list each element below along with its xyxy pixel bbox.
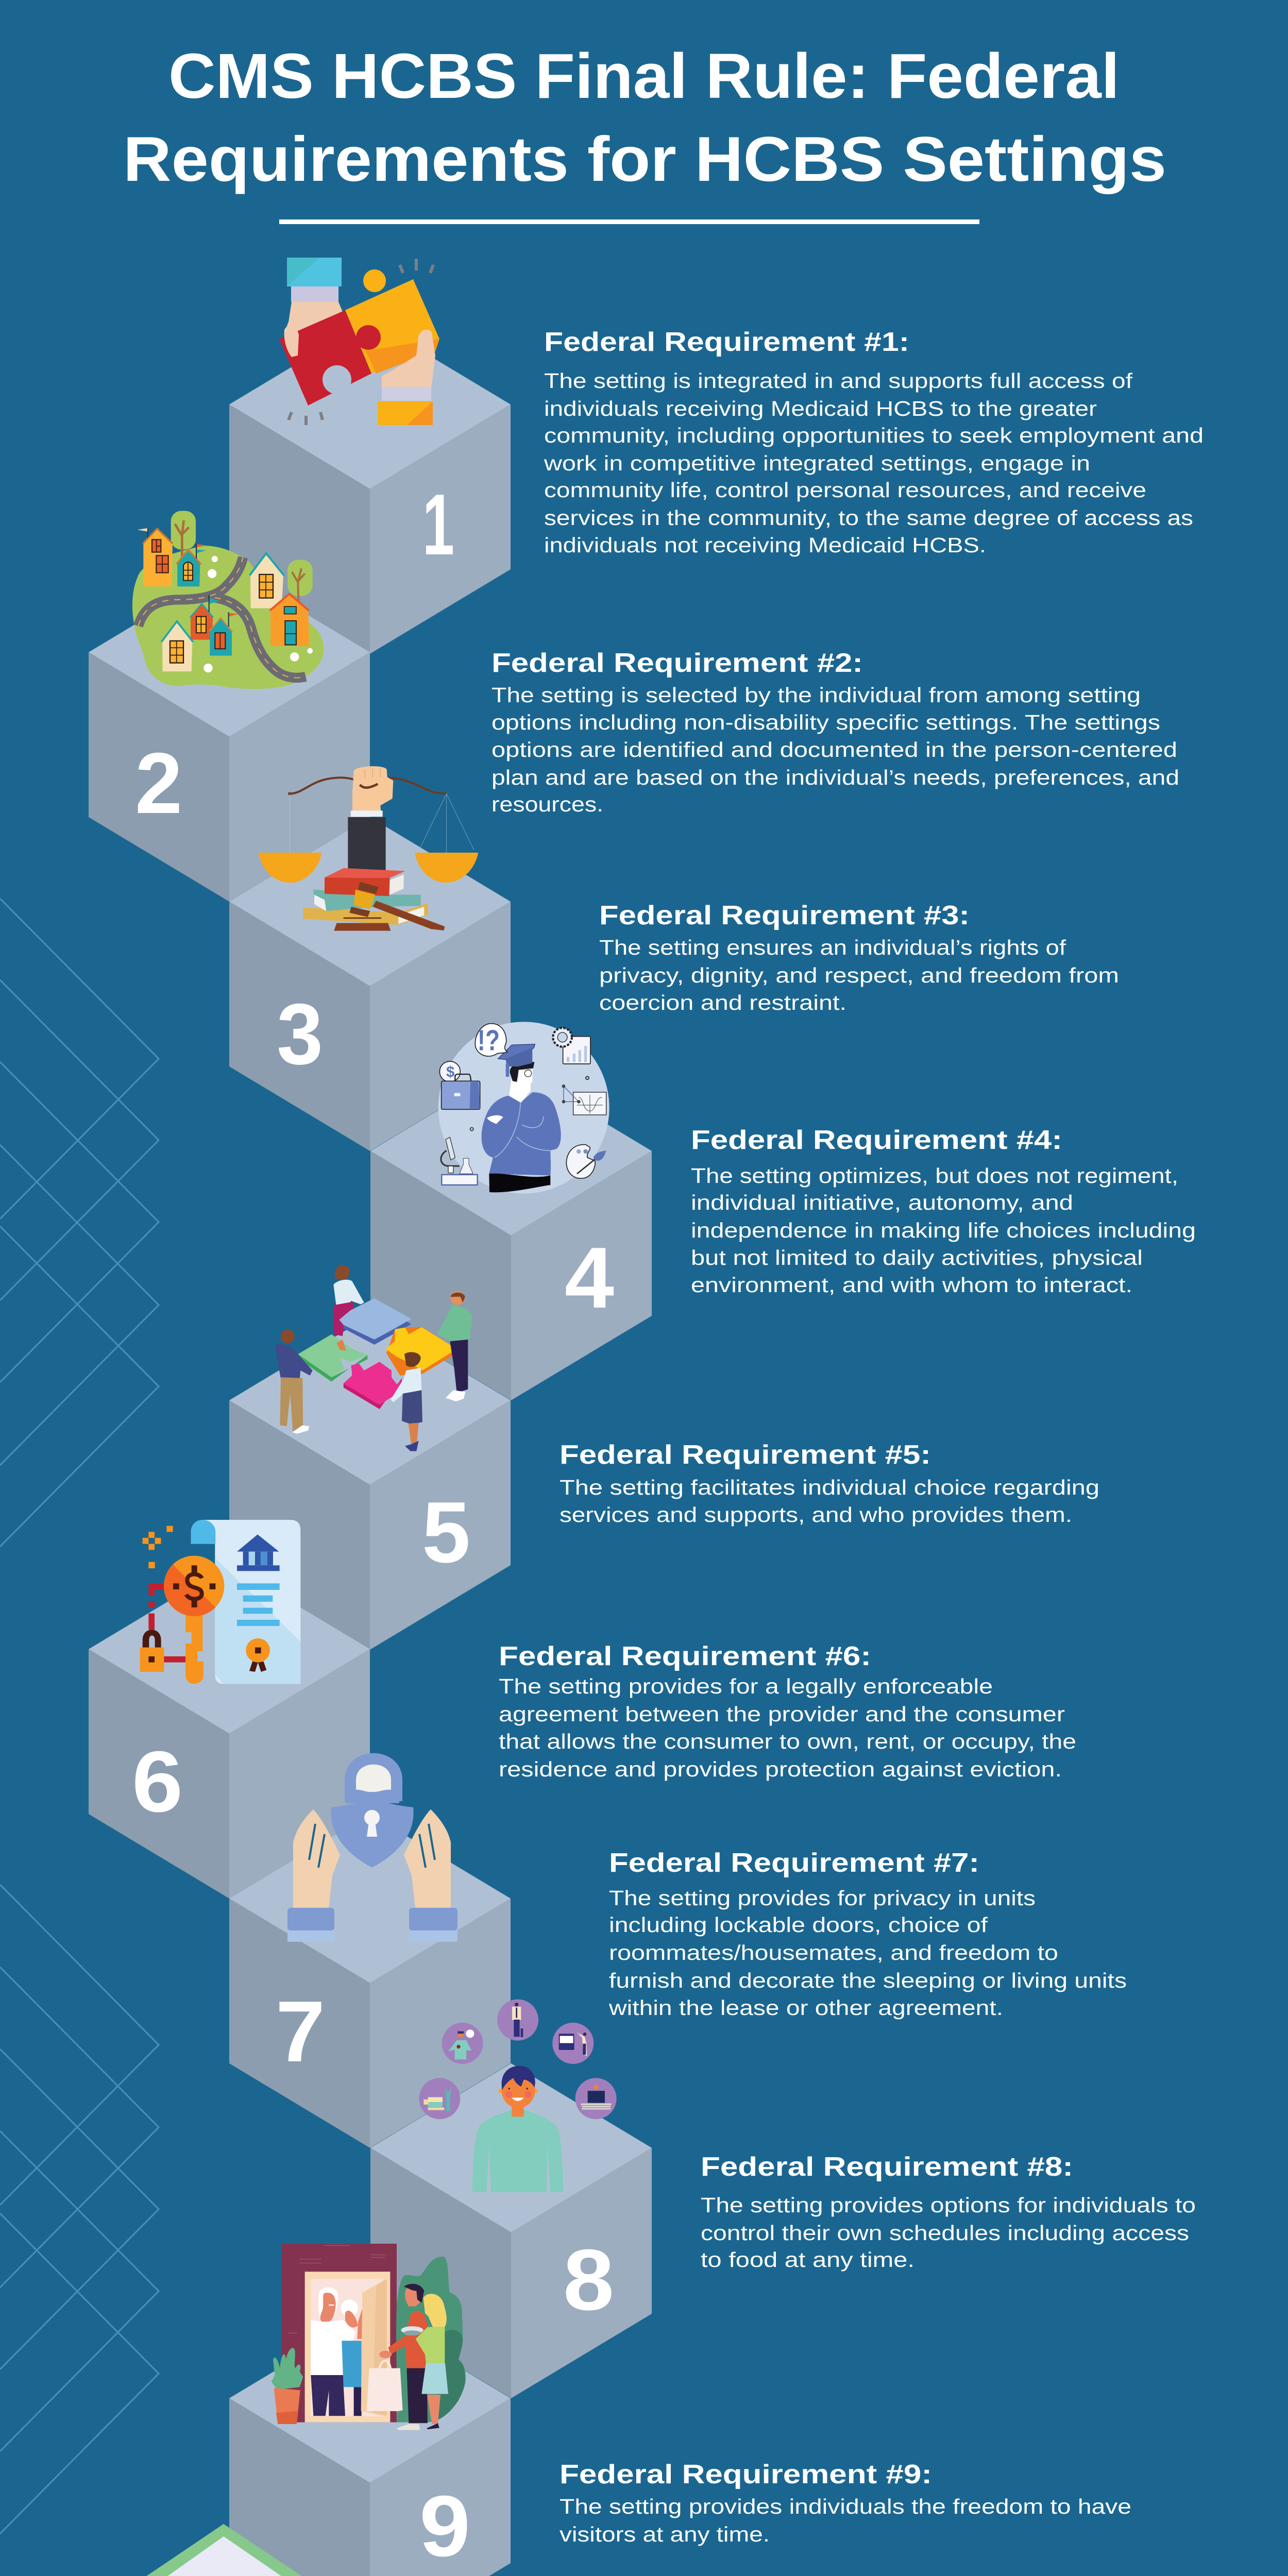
cube 3: 3 bbox=[277, 986, 323, 1082]
text block: requirement 4 bbox=[691, 1125, 1196, 1297]
text block: requirement 9: The setting provides individuals the freedom to have bbox=[560, 2495, 1131, 2518]
text block: requirement 5: The setting facilitates individual choice regarding bbox=[560, 1476, 1099, 1499]
text block: requirement 5: services and supports, and who provides them. bbox=[560, 1503, 1072, 1527]
text block: requirement 2 bbox=[492, 648, 1179, 816]
text block: requirement 4: independence in making life choices including bbox=[691, 1218, 1196, 1242]
icon: graduate thinking with surrounding objects: !? bbox=[478, 1024, 500, 1057]
icon: scales of justice, books and gavel bbox=[259, 766, 478, 931]
text block: requirement 2: options are identified and documented in the person-centered bbox=[492, 738, 1177, 761]
text block: requirement 1: community, including opportunities to seek employment and bbox=[544, 423, 1204, 447]
text block: requirement 4: but not limited to daily activities, physical bbox=[691, 1246, 1143, 1269]
text block: requirement 8: Federal Requirement #8: bbox=[701, 2152, 1073, 2182]
text block: requirement 9: visitors at any time. bbox=[560, 2522, 770, 2546]
icon: village map with houses and road bbox=[132, 511, 324, 689]
text block: requirement 1: individuals receiving Medicaid HCBS to the greater bbox=[544, 397, 1097, 420]
text block: requirement 2: resources. bbox=[492, 792, 603, 816]
cube 6 bbox=[89, 1565, 370, 1899]
icon: key, lock and legal document bbox=[140, 1520, 300, 1684]
text block: requirement 2: plan and are based on the individual’s needs, preferences, and bbox=[492, 766, 1179, 789]
text block: requirement 7: roommates/housemates, and freedom to bbox=[609, 1941, 1058, 1964]
text block: requirement 7: including lockable doors, choice of bbox=[609, 1913, 988, 1937]
text block: requirement 7 bbox=[608, 1848, 1127, 2020]
text block: requirement 9: Federal Requirement #9: bbox=[560, 2460, 932, 2489]
cube 4 bbox=[370, 1066, 652, 1400]
text block: requirement 1: community life, control personal resources, and receive bbox=[544, 478, 1146, 502]
text block: requirement 6 bbox=[499, 1641, 1076, 1781]
text block: requirement 5: Federal Requirement #5: bbox=[560, 1440, 931, 1470]
icon: house with key and keyhole bbox=[144, 2524, 307, 2576]
text block: requirement 8 bbox=[701, 2152, 1196, 2272]
cube 3 bbox=[229, 817, 511, 1151]
title: Requirements for HCBS Settings bbox=[123, 124, 1166, 195]
text block: requirement 6: The setting provides for a legally enforceable bbox=[499, 1674, 993, 1698]
text block: requirement 9 bbox=[560, 2460, 1131, 2546]
cube 5 bbox=[229, 1316, 511, 1650]
text block: requirement 1: Federal Requirement #1: bbox=[544, 327, 909, 357]
text block: requirement 5 bbox=[560, 1440, 1099, 1527]
text block: requirement 3 bbox=[599, 901, 1119, 1014]
cube 10 bbox=[89, 2563, 370, 2576]
cube 7 bbox=[229, 1814, 511, 2148]
icon: four people assembling a puzzle bbox=[275, 1265, 472, 1451]
text block: requirement 4: The setting optimizes, but does not regiment, bbox=[691, 1164, 1178, 1188]
cube 6: 6 bbox=[132, 1733, 183, 1830]
text block: requirement 3: coercion and restraint. bbox=[599, 991, 846, 1014]
cube 9: 9 bbox=[419, 2478, 470, 2574]
text block: requirement 6: agreement between the provider and the consumer bbox=[499, 1702, 1065, 1726]
text block: requirement 1: services in the community, to the same degree of access as bbox=[544, 506, 1193, 530]
text block: requirement 1: The setting is integrated in and supports full access of bbox=[544, 369, 1133, 393]
text block: requirement 1 bbox=[544, 327, 1204, 557]
text block: requirement 8: The setting provides options for individuals to bbox=[701, 2193, 1196, 2217]
cube 9 bbox=[229, 2314, 511, 2576]
text block: requirement 3: privacy, dignity, and respect, and freedom from bbox=[599, 963, 1119, 987]
text block: requirement 7: Federal Requirement #7: bbox=[609, 1848, 979, 1878]
icon: graduate thinking with surrounding objects: $ bbox=[446, 1064, 454, 1081]
text block: requirement 3: Federal Requirement #3: bbox=[599, 901, 970, 930]
cube 1: 1 bbox=[422, 476, 454, 573]
cube 1 bbox=[229, 320, 511, 654]
text block: requirement 6: residence and provides protection against eviction. bbox=[499, 1757, 1062, 1781]
icon: graduate thinking with surrounding objects bbox=[438, 1022, 609, 1194]
cube 7: 7 bbox=[276, 1983, 325, 2080]
icon: person with daily schedule activities bbox=[419, 1999, 617, 2192]
text block: requirement 3: The setting ensures an individual’s rights of bbox=[599, 936, 1066, 959]
text block: requirement 7: within the lease or other agreement. bbox=[608, 1996, 1003, 2020]
cube 2: 2 bbox=[135, 735, 182, 832]
cube 5: 5 bbox=[422, 1484, 470, 1581]
text block: requirement 1: individuals not receiving Medicaid HCBS. bbox=[544, 533, 986, 557]
text block: requirement 4: individual initiative, autonomy, and bbox=[691, 1191, 1073, 1214]
cube 8 bbox=[370, 2063, 652, 2398]
text block: requirement 6: Federal Requirement #6: bbox=[499, 1641, 871, 1671]
text block: requirement 8: control their own schedules including access bbox=[701, 2221, 1189, 2245]
title: CMS HCBS Final Rule: Federal bbox=[168, 41, 1120, 112]
text block: requirement 4: environment, and with whom to interact. bbox=[691, 1273, 1132, 1297]
cube 4: 4 bbox=[565, 1229, 614, 1326]
cube 2 bbox=[89, 568, 370, 902]
text block: requirement 8: to food at any time. bbox=[701, 2248, 914, 2272]
text block: requirement 7: The setting provides for privacy in units bbox=[609, 1886, 1036, 1910]
text block: requirement 4: Federal Requirement #4: bbox=[691, 1125, 1062, 1155]
text block: requirement 7: furnish and decorate the sleeping or living units bbox=[609, 1969, 1127, 1992]
title bbox=[123, 41, 1166, 195]
text block: requirement 6: that allows the consumer to own, rent, or occupy, the bbox=[499, 1730, 1076, 1753]
icon: hands protecting a padlock bbox=[287, 1759, 457, 1942]
cube 8: 8 bbox=[563, 2231, 614, 2328]
icon: hands joining puzzle pieces bbox=[279, 258, 439, 425]
text block: requirement 2: Federal Requirement #2: bbox=[492, 648, 863, 678]
text block: requirement 2: options including non-disability specific settings. The settings bbox=[492, 710, 1160, 734]
text block: requirement 1: work in competitive integrated settings, engage in bbox=[544, 451, 1090, 475]
text block: requirement 2: The setting is selected by the individual from among setting bbox=[492, 683, 1141, 707]
icon: visitors at a doorway with a plant bbox=[272, 2244, 466, 2430]
